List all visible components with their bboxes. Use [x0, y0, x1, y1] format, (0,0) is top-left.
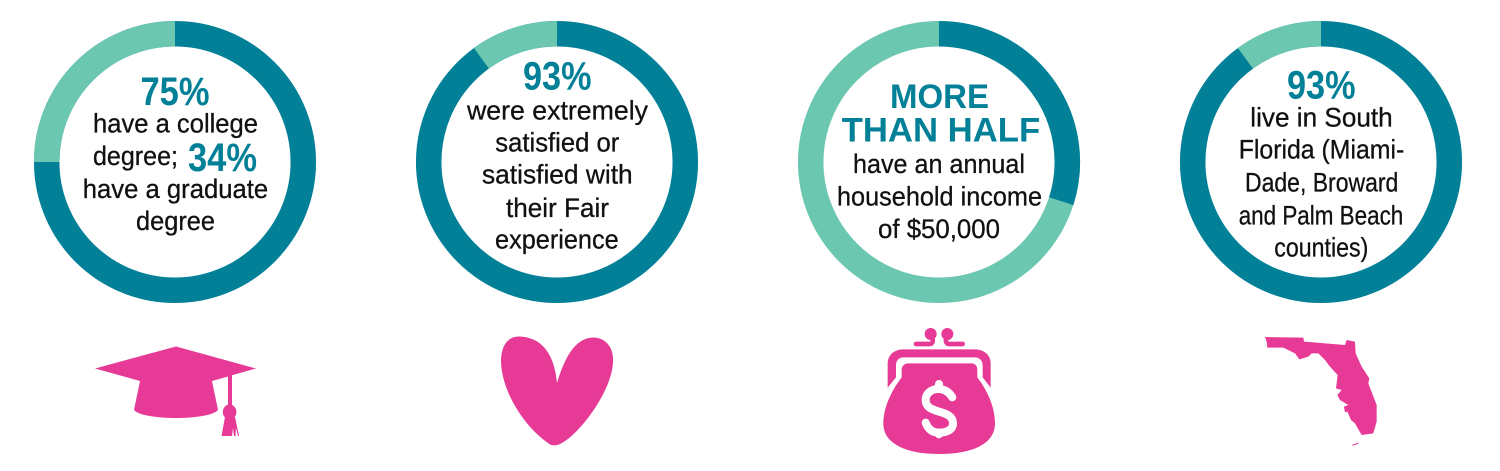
text: satisfaction statistic: 93%	[523, 54, 592, 98]
panel: South Florida	[1193, 34, 1449, 446]
text: residence statistic: live in South	[1250, 102, 1393, 132]
text: college degree statistic: 34%	[188, 136, 257, 180]
text: income statistic: household income	[837, 182, 1042, 212]
panel: household income	[811, 34, 1067, 454]
text: satisfaction statistic: experience	[495, 225, 619, 255]
text: residence statistic: 93%	[1287, 64, 1356, 108]
text: income statistic: THAN HALF	[842, 112, 1040, 150]
panel: college degree	[47, 34, 303, 436]
donut chart: more than half	[811, 34, 1067, 290]
panel: satisfaction	[429, 34, 685, 445]
text: residence statistic: Florida (Miami-	[1239, 135, 1404, 165]
text: college degree statistic: have a graduate	[83, 174, 268, 204]
text: income statistic: of $50,000	[878, 214, 1000, 244]
text: college degree statistic: have a college	[93, 109, 258, 139]
text: college degree statistic: degree	[136, 206, 215, 236]
donut chart: 75 percent	[47, 34, 303, 290]
text: residence statistic: Dade, Broward	[1245, 167, 1398, 197]
text: income statistic: MORE	[890, 78, 989, 116]
donut chart: 93 percent satisfied	[429, 34, 685, 290]
text: college degree statistic: degree;	[93, 141, 178, 171]
text: residence statistic: counties)	[1274, 232, 1368, 262]
icon: heart	[501, 336, 613, 445]
text: satisfaction statistic: satisfied or	[495, 127, 619, 157]
donut chart: 93 percent South Florida	[1193, 34, 1449, 290]
text: income statistic: have an annual	[853, 149, 1025, 179]
text: residence statistic: and Palm Beach	[1239, 200, 1403, 230]
text: satisfaction statistic: satisfied with	[482, 160, 633, 190]
icon: Florida map	[1265, 337, 1377, 446]
icon: graduation cap	[95, 346, 256, 436]
text: satisfaction statistic: their Fair	[506, 193, 609, 223]
text: residence statistic	[1239, 64, 1404, 262]
icon: coin purse	[883, 328, 995, 454]
text: college degree statistic: 75%	[140, 70, 210, 114]
text: satisfaction statistic	[466, 54, 649, 255]
text: college degree statistic	[83, 70, 268, 236]
text: income statistic	[837, 78, 1042, 244]
text: satisfaction statistic: were extremely	[466, 95, 649, 125]
